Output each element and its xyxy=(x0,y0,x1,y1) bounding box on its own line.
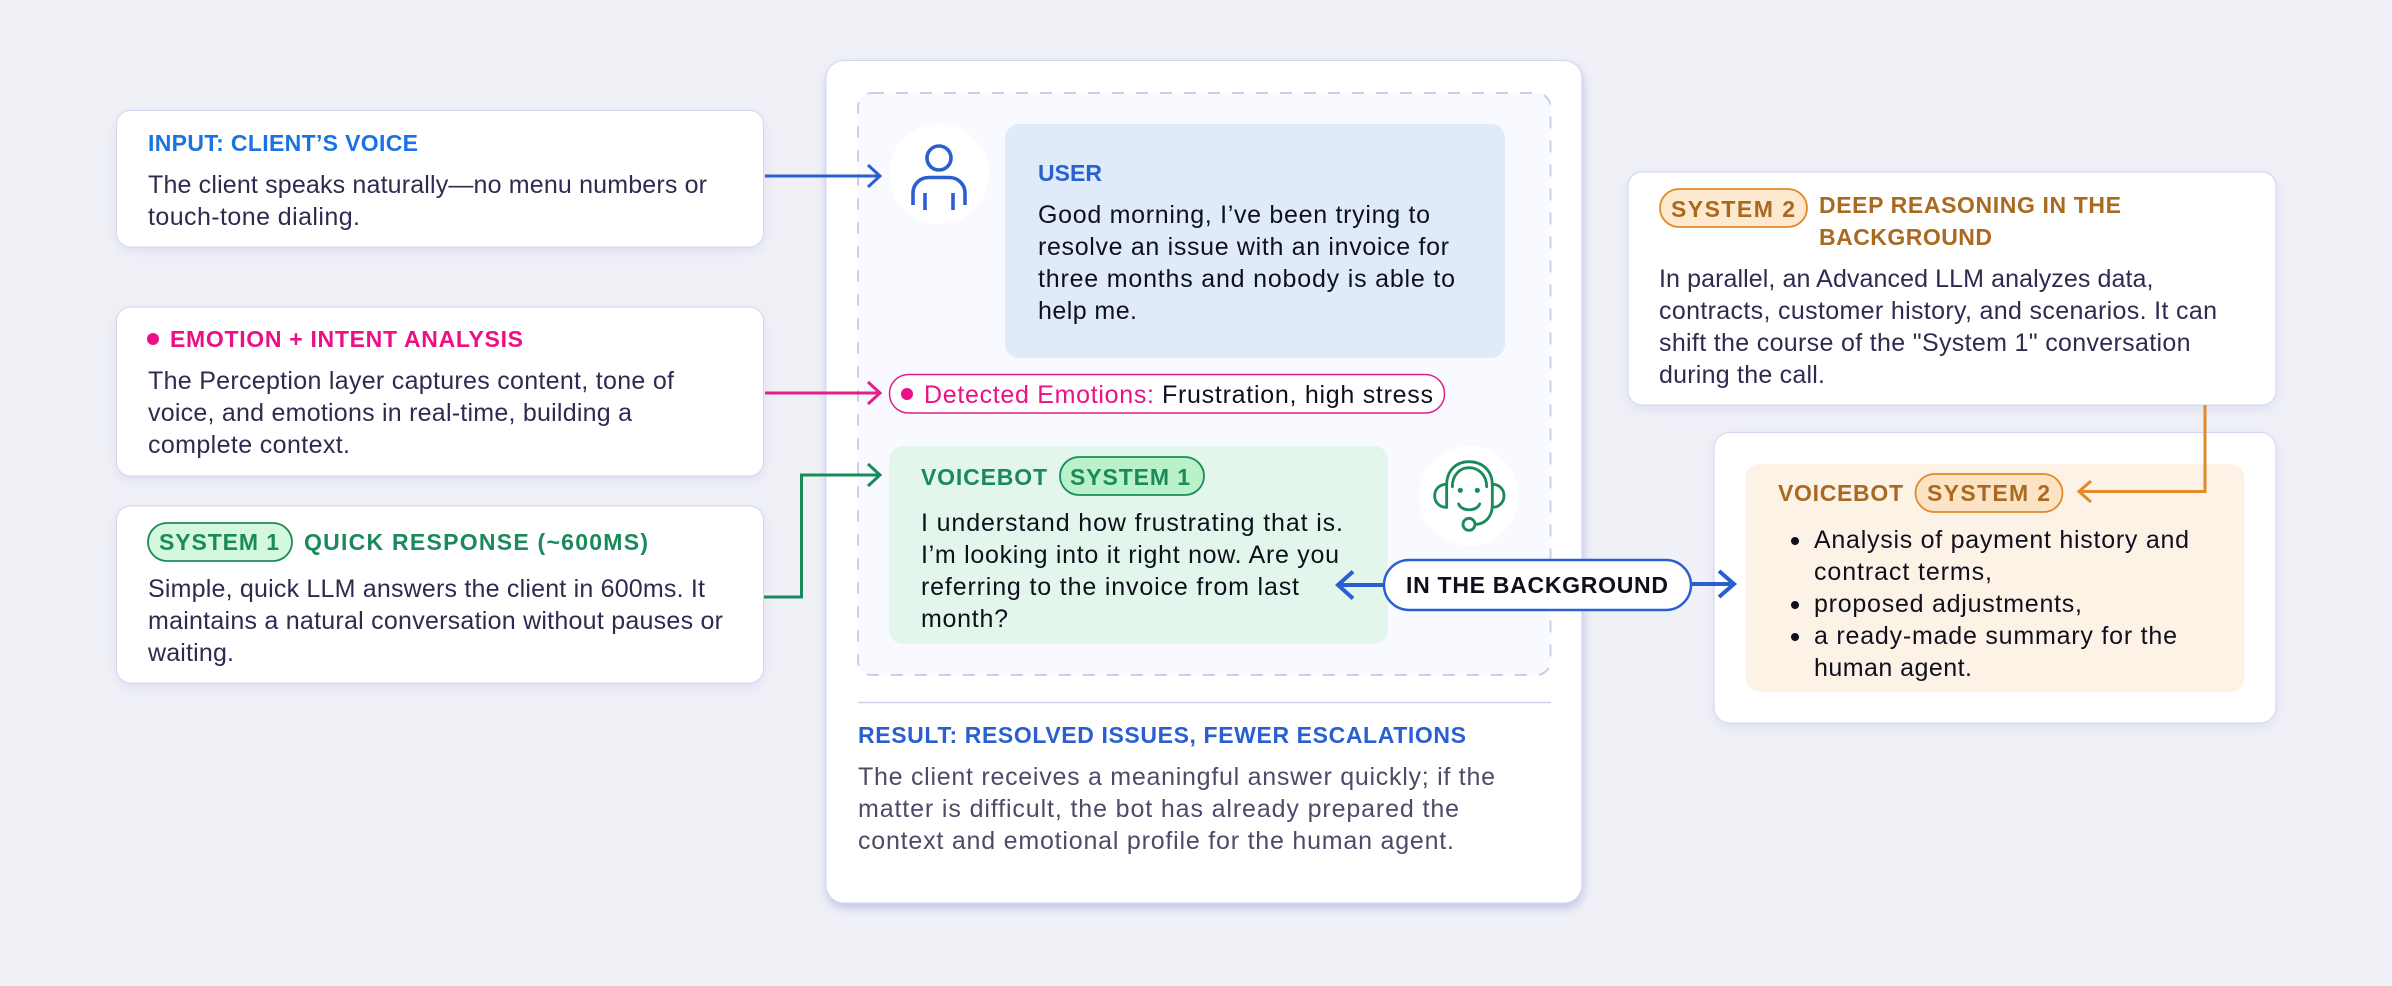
arrow: input to user xyxy=(765,165,880,187)
text: emotion description xyxy=(148,367,674,459)
badge: system 1 xyxy=(148,523,292,561)
badge: in the background xyxy=(1384,560,1691,610)
badge: system 1: SYSTEM 1 xyxy=(159,529,279,555)
panel: input client's voice xyxy=(116,110,764,247)
text: system 1 description: waiting. xyxy=(147,639,234,667)
list: system 2 outputs: Analysis of payment history and xyxy=(1814,526,2189,554)
label: voicebot: VOICEBOT xyxy=(921,464,1047,490)
badge: detected emotions: Frustration, high stress xyxy=(1162,381,1433,409)
badge: detected emotions xyxy=(890,374,1444,413)
panel: dashed conversation area xyxy=(858,93,1550,675)
text: result description: context and emotional profile for the human agent. xyxy=(858,827,1454,855)
icon: user avatar xyxy=(889,124,989,224)
badge: in the background: IN THE BACKGROUND xyxy=(1406,572,1668,598)
text: result description: The client receives a meaningful answer quickly; if the xyxy=(858,763,1495,791)
heading: result: RESULT: RESOLVED ISSUES, FEWER ESCALATIONS xyxy=(858,722,1466,748)
text: system 2 description: In parallel, an Advanced LLM analyzes data, xyxy=(1659,265,2154,293)
panel: system 2 voicebot output card xyxy=(1714,432,2276,723)
text: voicebot message: month? xyxy=(921,605,1008,633)
list: system 2 outputs: human agent. xyxy=(1814,654,1972,682)
text: user message: help me. xyxy=(1038,297,1137,325)
text: system 1 description: maintains a natural conversation without pauses or xyxy=(148,607,723,635)
heading: input: INPUT: CLIENT’S VOICE xyxy=(148,130,418,156)
panel: system 2 voicebot bubble xyxy=(1746,464,2244,692)
list: system 2 outputs xyxy=(1791,526,2189,682)
icon: voicebot headset avatar xyxy=(1419,446,1519,546)
panel: central conversation card xyxy=(826,60,1582,903)
text: voicebot message: referring to the invoice from last xyxy=(921,573,1299,601)
text: result description xyxy=(858,763,1495,855)
heading: emotion and intent: EMOTION + INTENT ANALYSIS xyxy=(170,326,523,352)
text: input description: touch-tone dialing. xyxy=(148,203,360,231)
list: system 2 outputs: proposed adjustments, xyxy=(1814,590,2082,618)
label: user: USER xyxy=(1038,160,1102,186)
text: system 1 description xyxy=(147,575,723,667)
text: emotion description: complete context. xyxy=(148,431,350,459)
badge: system 1 xyxy=(1060,457,1204,495)
text: input description: The client speaks naturally—no menu numbers or xyxy=(148,171,707,199)
text: result description: matter is difficult, the bot has already prepared the xyxy=(858,795,1459,823)
icon: pink dot xyxy=(147,333,159,345)
arrow: system 1 to voicebot xyxy=(764,464,880,597)
text: user message: Good morning, I’ve been trying to xyxy=(1038,201,1430,229)
panel: voicebot speech bubble xyxy=(889,446,1388,644)
arrow: system 2 to voicebot output xyxy=(2079,405,2205,502)
text: voicebot message: I’m looking into it right now. Are you xyxy=(921,541,1339,569)
panel: user speech bubble xyxy=(1005,124,1505,358)
badge: system 1: SYSTEM 1 xyxy=(1070,464,1190,490)
heading: quick response: QUICK RESPONSE (~600MS) xyxy=(304,529,648,555)
list: system 2 outputs: contract terms, xyxy=(1814,558,1992,586)
text: user message: resolve an issue with an invoice for xyxy=(1038,233,1449,261)
heading: deep reasoning: DEEP REASONING IN THE xyxy=(1819,192,2121,218)
label: voicebot: VOICEBOT xyxy=(1778,480,1903,506)
text: user message xyxy=(1038,201,1455,325)
text: system 2 description: contracts, customer history, and scenarios. It can xyxy=(1659,297,2217,325)
text: emotion description: voice, and emotions in real-time, building a xyxy=(148,399,632,427)
panel: system 1 quick response xyxy=(116,506,764,683)
arrow: background to system 1 xyxy=(1338,572,1383,598)
text: voicebot message xyxy=(921,509,1343,633)
heading: deep reasoning xyxy=(1819,192,2121,250)
badge: system 2 xyxy=(1916,474,2062,512)
list: system 2 outputs: a ready-made summary for the xyxy=(1814,622,2177,650)
arrow: emotion analysis to detected emotions xyxy=(765,382,880,404)
text: system 1 description: Simple, quick LLM answers the client in 600ms. It xyxy=(148,575,705,603)
text: emotion description: The Perception layer captures content, tone of xyxy=(148,367,674,395)
heading: deep reasoning: BACKGROUND xyxy=(1819,224,1992,250)
text: voicebot message: I understand how frustrating that is. xyxy=(921,509,1343,537)
arrow: background to system 2 xyxy=(1692,571,1734,597)
text: user message: three months and nobody is able to xyxy=(1038,265,1455,293)
text: system 2 description: shift the course of the "System 1" conversation xyxy=(1659,329,2190,357)
text: input description xyxy=(148,171,707,231)
panel: system 2 deep reasoning xyxy=(1628,172,2276,405)
badge: system 2: SYSTEM 2 xyxy=(1671,196,1795,222)
badge: system 2: SYSTEM 2 xyxy=(1927,480,2050,506)
text: system 2 description xyxy=(1659,265,2217,389)
badge: detected emotions: Detected Emotions: xyxy=(924,381,1154,409)
panel: emotion and intent analysis xyxy=(116,307,764,476)
text: system 2 description: during the call. xyxy=(1659,361,1825,389)
badge: system 2 xyxy=(1660,189,1807,227)
